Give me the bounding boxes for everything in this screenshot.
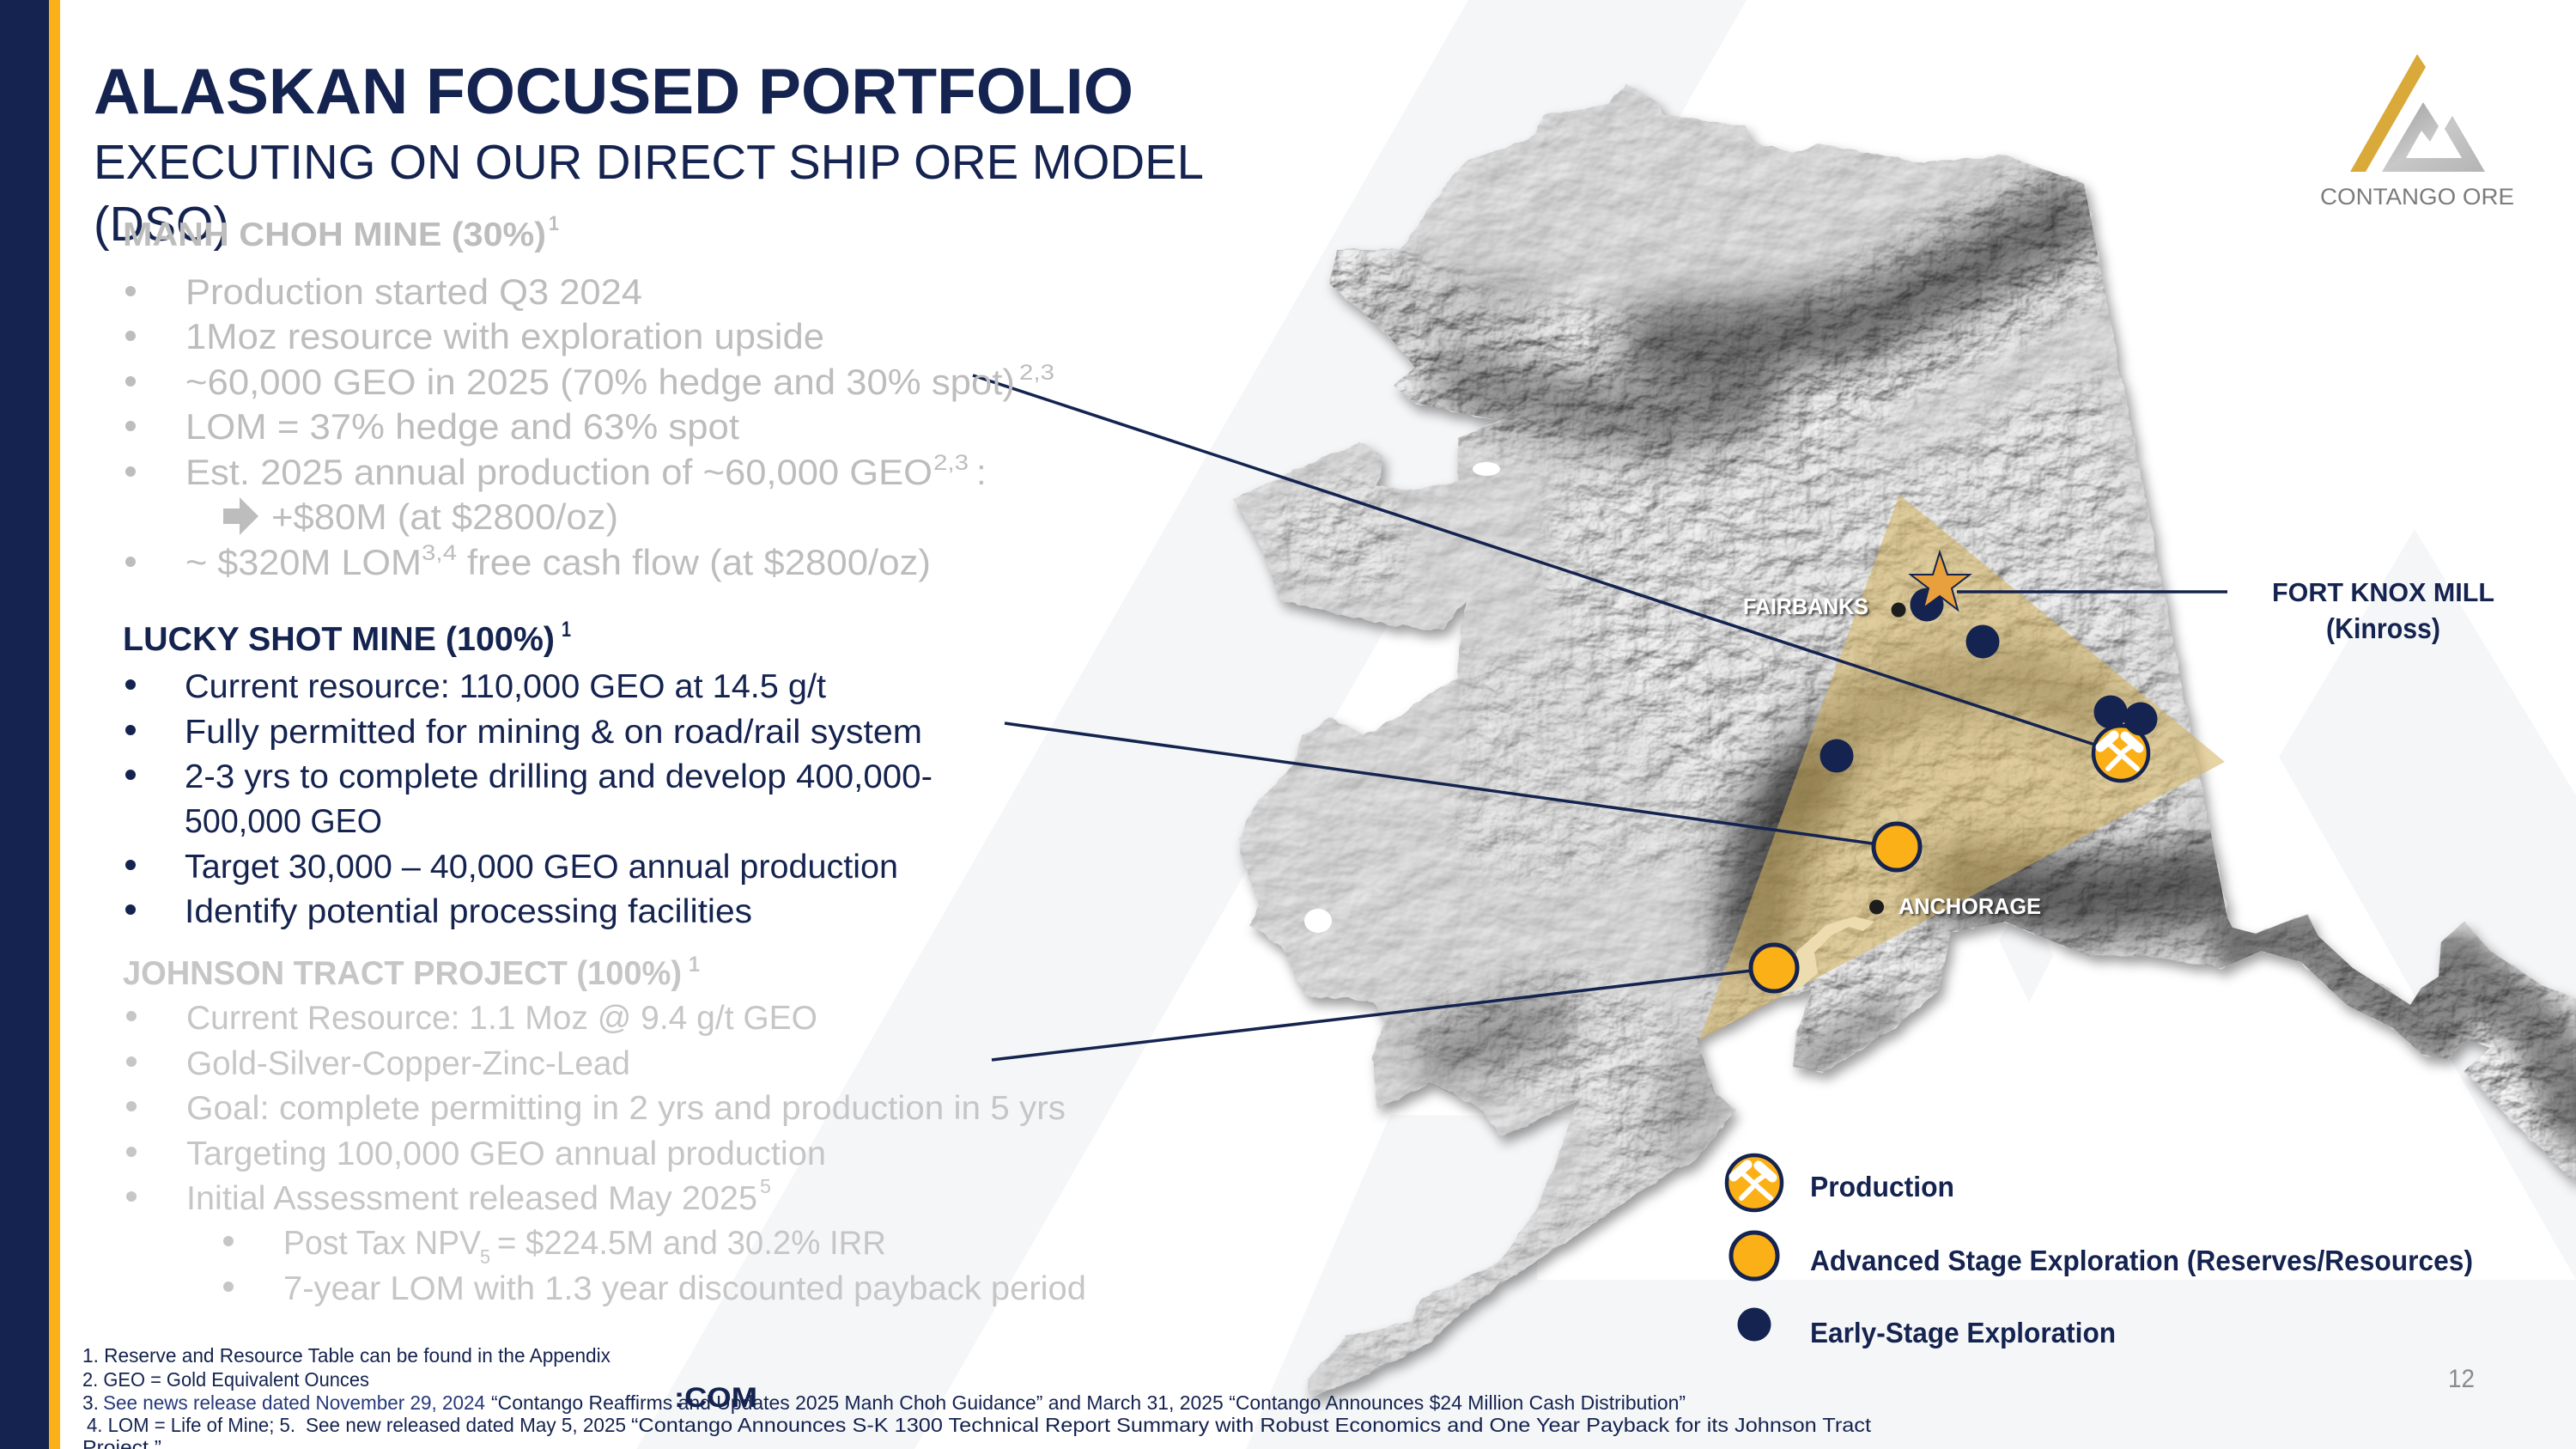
footnotes — [82, 1344, 1872, 1449]
city label: Fairbanks: FAIRBANKS — [1743, 594, 1868, 619]
bullet text lines: Current resource: 110,000 GEO at 14.5 g/t — [185, 668, 826, 705]
bullet text lines — [185, 668, 933, 930]
superscript 2,3 second: 2,3 — [933, 451, 969, 475]
footnotes: See new released dated May 5, 2025 — [306, 1414, 626, 1436]
bullet text lines: Post Tax NPV — [283, 1225, 481, 1262]
bullet text: resource: 1Moz resource with exploration upside — [185, 316, 824, 356]
panel: Manh Choh Mine — [123, 212, 1054, 582]
bullet text lines: 5 — [760, 1175, 771, 1197]
legend icon: advanced — [1731, 1233, 1777, 1279]
bullet text lines: Targeting 100,000 GEO annual production — [186, 1135, 826, 1172]
colon: : — [976, 452, 987, 492]
website fragment: :COM — [674, 1382, 757, 1413]
city dot: Anchorage — [1869, 900, 1884, 914]
bullet text: LOM: LOM = 37% hedge and 63% spot — [185, 406, 739, 447]
callout line: Lucky Shot — [1005, 723, 1897, 847]
superscript 1: 1 — [562, 618, 571, 642]
legend label: advanced: Advanced Stage Exploration (Reserves/Resources) — [1810, 1245, 2473, 1276]
legend — [1727, 1155, 2473, 1349]
superscript 1: 1 — [549, 212, 559, 235]
subtitle: EXECUTING ON OUR DIRECT SHIP ORE MODEL — [94, 135, 1204, 190]
bullets — [125, 286, 136, 567]
superscript 3,4: 3,4 — [422, 541, 457, 565]
panel: Johnson Tract Project — [123, 953, 1086, 1307]
bullet text lines: 7-year LOM with 1.3 year discounted payback period — [283, 1270, 1086, 1307]
legend label: early: Early-Stage Exploration — [1810, 1317, 2116, 1349]
subtitle — [94, 135, 1204, 252]
bullet text lines — [186, 1000, 1086, 1307]
star: Fort Knox mill — [1911, 552, 1970, 610]
bullets — [126, 1011, 234, 1292]
early-stage markers near Manh Choh — [2093, 696, 2157, 735]
footnotes: 2. GEO = Gold Equivalent Ounces — [82, 1368, 369, 1391]
callout line: Johnson Tract — [992, 968, 1774, 1060]
bullet text lines: Gold-Silver-Copper-Zinc-Lead — [186, 1045, 630, 1082]
bullet text lines: Current Resource: 1.1 Moz @ 9.4 g/t GEO — [186, 1000, 817, 1037]
legend label: production: Production — [1810, 1171, 1954, 1202]
left navy sidebar — [0, 0, 49, 1449]
white lakes — [1473, 462, 1500, 476]
label: Fort Knox Mill — [2272, 577, 2494, 644]
bullet text: production start: Production started Q3 2024 — [185, 271, 642, 312]
bullet text: LOM cash: ~ $320M LOM — [185, 542, 422, 582]
title: ALASKAN FOCUSED PORTFOLIO — [94, 55, 1133, 127]
background watermark shapes — [636, 0, 2576, 1449]
logo wordmark: CONTANGO ORE — [2320, 184, 2514, 210]
bullet text lines: Identify potential processing facilities — [185, 893, 752, 930]
bullet text lines: 500,000 GEO — [185, 803, 382, 840]
left orange stripe — [49, 0, 60, 1449]
bullet text lines: Goal: complete permitting in 2 yrs and production in 5 yrs — [186, 1090, 1066, 1127]
bullet text lines: 2-3 yrs to complete drilling and develop 400,000- — [185, 758, 933, 795]
callout line: Manh Choh — [973, 375, 2121, 753]
bullet text lines: Initial Assessment released May 2025 — [186, 1180, 757, 1217]
production marker: Manh Choh — [2093, 726, 2148, 781]
sub-bullet: 80M: +$80M (at $2800/oz) — [271, 496, 618, 537]
bullet text lines: 5 — [480, 1245, 490, 1268]
bullet text lines: Fully permitted for mining & on road/rail system — [185, 714, 922, 751]
heading: Manh Choh: MANH CHOH MINE (30%) — [123, 216, 546, 253]
heading: Lucky Shot: LUCKY SHOT MINE (100%) — [123, 621, 555, 658]
callout line: Fort Knox — [1957, 590, 2227, 594]
advanced marker: Johnson Tract — [1751, 945, 1797, 991]
footnotes: 4. LOM = Life of Mine; 5. — [87, 1414, 295, 1436]
superscript 1: 1 — [689, 953, 700, 977]
bullet text: estimated production: Est. 2025 annual production of ~60,000 GEO — [185, 452, 933, 492]
arrow — [223, 497, 258, 535]
city label: Anchorage: ANCHORAGE — [1899, 893, 2041, 919]
bullet text lines: = $224.5M and 30.2% IRR — [497, 1225, 886, 1262]
advanced marker: Lucky Shot — [1874, 824, 1920, 870]
label: Fort Knox Mill: FORT KNOX MILL — [2272, 577, 2494, 607]
bullet text: 2025 GEO: ~60,000 GEO in 2025 (70% hedge and 30% spot) — [185, 362, 1015, 402]
bullet text lines: Target 30,000 – 40,000 GEO annual production — [185, 849, 898, 886]
logo silver mountain — [2382, 102, 2485, 172]
logo gold bar — [2350, 54, 2426, 172]
footnotes: “Contango Reaffirms and Updates 2025 Manh Choh Guidance” and March 31, 2025 “Contango Announces $24 Million Cash Distribution” — [491, 1391, 1686, 1414]
logo — [2320, 54, 2514, 210]
page number: 12 — [2448, 1365, 2475, 1393]
free cash flow: free cash flow (at $2800/oz) — [467, 542, 931, 582]
panel: Lucky Shot Mine — [123, 618, 933, 930]
gold operating triangle — [1699, 495, 2225, 1040]
legend icon: production — [1727, 1155, 1782, 1210]
heading: Johnson Tract: JOHNSON TRACT PROJECT (100%) — [123, 955, 682, 992]
footnotes: 1. Reserve and Resource Table can be found in the Appendix — [82, 1344, 611, 1367]
bullets — [125, 679, 136, 915]
city dot: Fairbanks — [1891, 603, 1906, 617]
footnotes: 3. — [82, 1391, 99, 1414]
footnotes: See news release dated November 29, 2024 — [103, 1391, 485, 1414]
superscript 2,3: 2,3 — [1019, 361, 1054, 385]
Cook Inlet tint inside the triangle — [1782, 916, 1874, 995]
subtitle: (DSO) — [94, 197, 229, 252]
shaded relief map of Alaska — [1185, 52, 2576, 1449]
early-stage exploration markers — [1820, 588, 1999, 773]
label: Fort Knox Mill: (Kinross) — [2326, 612, 2440, 644]
legend icon: early — [1738, 1307, 1771, 1342]
footnotes: “Contango Announces S-K 1300 Technical Report Summary with Robust Economics and One Year Payback for its Johnson Tract — [631, 1414, 1872, 1436]
